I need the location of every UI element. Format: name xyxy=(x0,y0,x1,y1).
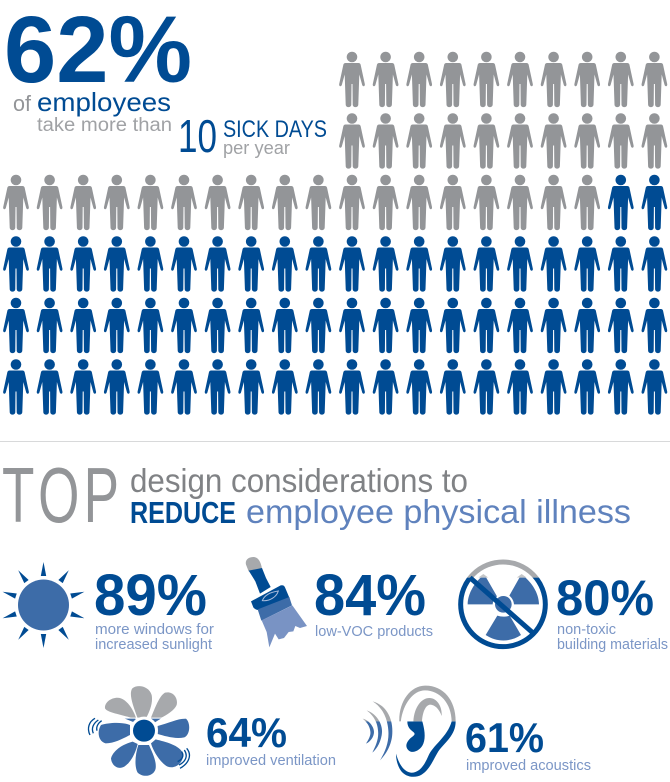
label: low-VOC products: low-VOC products xyxy=(315,623,433,640)
value: 89%: 89% xyxy=(94,563,207,628)
stat: 64% improved ventilation xyxy=(88,686,336,776)
value: 80%: 80% xyxy=(556,570,654,626)
label: more windows for: more windows for xyxy=(95,621,214,638)
label: improved acoustics: improved acoustics xyxy=(466,757,591,774)
value: 61%: 61% xyxy=(465,714,544,761)
text: of: of xyxy=(13,91,32,116)
section heading xyxy=(2,453,631,540)
icon: ear and sound waves xyxy=(363,686,456,777)
pictogram: 100 people, 62 highlighted xyxy=(3,52,667,415)
value: 64%: 64% xyxy=(206,709,287,756)
icon: no radiation xyxy=(461,562,545,647)
icon: fan xyxy=(88,686,189,776)
gray people xyxy=(3,52,667,230)
big statistic: 62% xyxy=(4,0,192,103)
heading: REDUCE: REDUCE xyxy=(130,495,236,530)
value: 84%: 84% xyxy=(314,563,426,628)
text: per year: per year xyxy=(223,138,290,158)
stat: 84% low-VOC products xyxy=(246,557,433,647)
text: sick days: SICK DAYS xyxy=(223,116,327,143)
stat: 89% more windows xyxy=(2,562,214,653)
heading: employee physical illness: employee physical illness xyxy=(246,493,631,530)
label: non-toxic: non-toxic xyxy=(557,621,616,638)
text: 10: 10 xyxy=(178,110,217,162)
icon: paint brush xyxy=(246,557,307,647)
heading: TOP: TOP xyxy=(2,453,119,540)
label: improved ventilation: improved ventilation xyxy=(206,752,336,769)
heading: design considerations to: design considerations to xyxy=(130,462,468,499)
label: increased sunlight: increased sunlight xyxy=(95,636,213,653)
stat: 61% improved acoustics xyxy=(363,686,591,777)
stat: 80% non-toxic xyxy=(461,562,668,653)
blue people xyxy=(3,175,667,415)
text: take more than: take more than xyxy=(37,115,172,136)
icon: sun xyxy=(2,562,85,648)
headline: 62% of employees xyxy=(4,0,327,162)
text: employees: employees xyxy=(37,87,171,117)
